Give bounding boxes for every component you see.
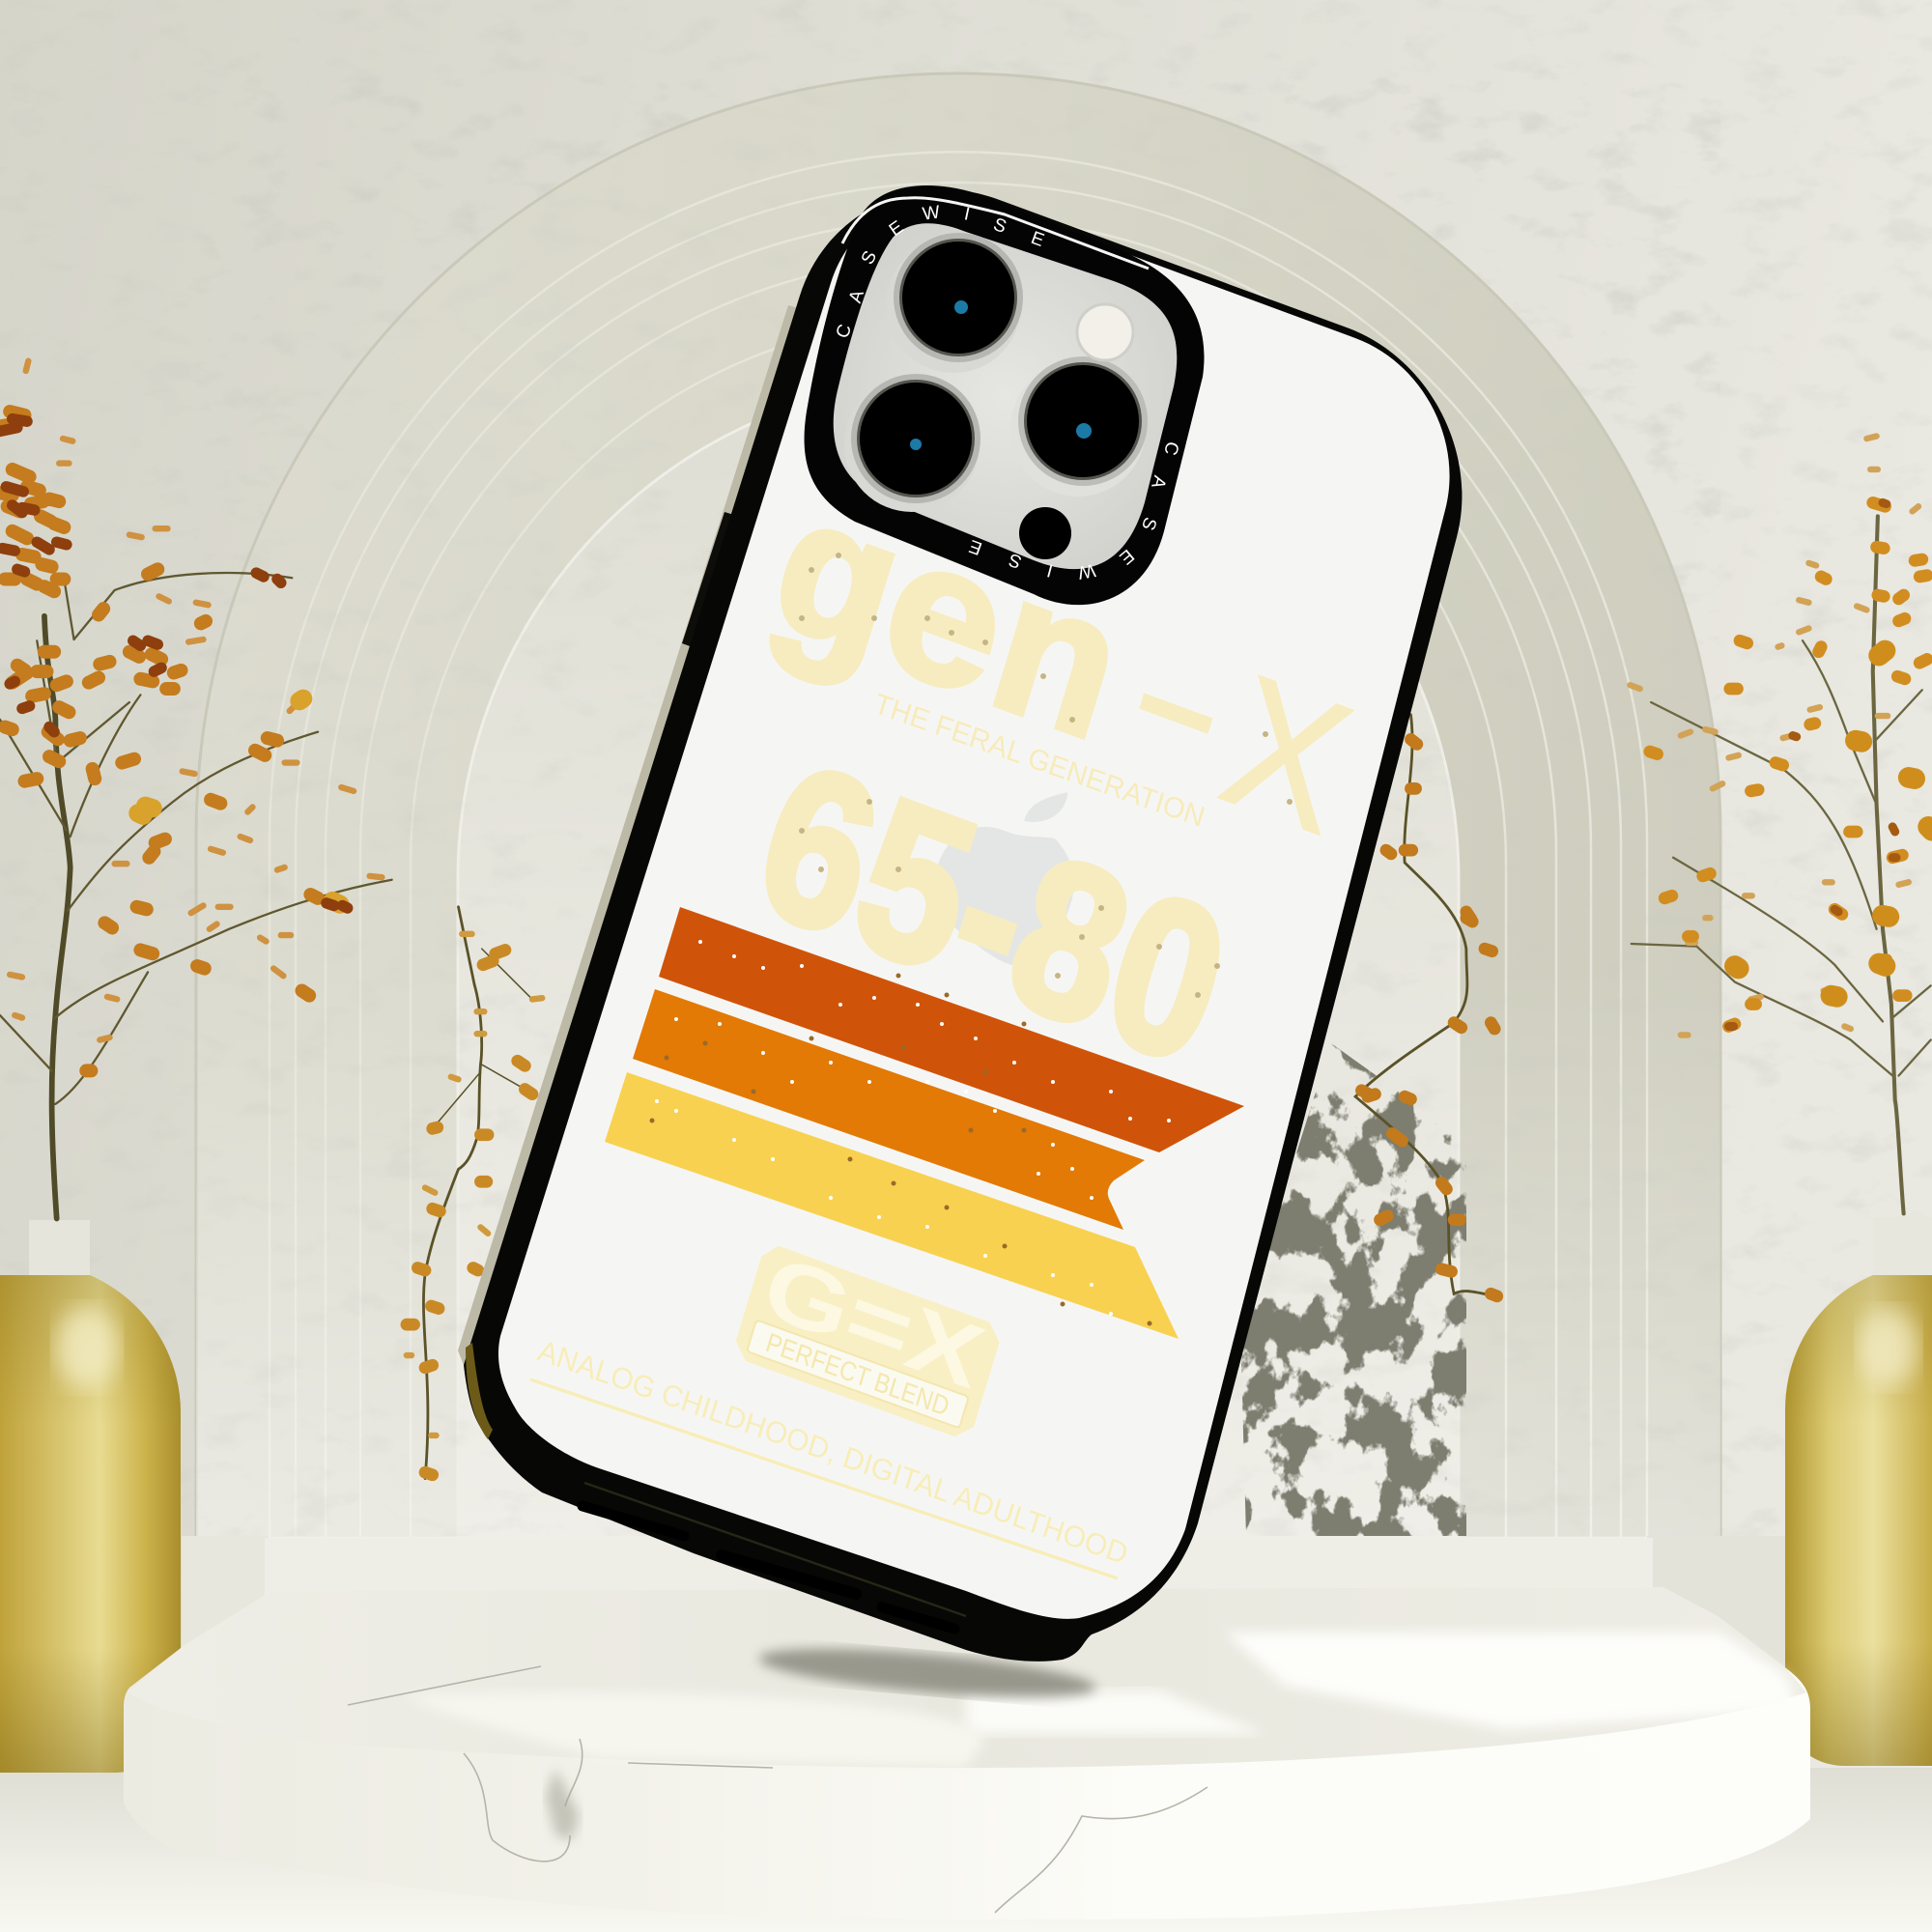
casewise ring text bottom: A [1147, 473, 1170, 491]
bottom slogan: ANALOG CHILDHOOD, DIGITAL ADULTHOOD [534, 1333, 1132, 1571]
casewise ring text top: C [833, 322, 856, 341]
plinth body [124, 1587, 1810, 1919]
side button [682, 512, 734, 647]
lens top [886, 233, 1023, 373]
years 65-80: 65-80 [735, 715, 1251, 1111]
badge caption: PERFECT BLEND [762, 1327, 952, 1422]
left hanging vine [407, 907, 542, 1479]
phone case body [464, 189, 1462, 1662]
stripe speckles [657, 942, 1169, 1314]
artwork: gen-x wordmark: – [1102, 605, 1251, 819]
sensor dot [1019, 507, 1071, 559]
artwork: gen-x wordmark: X [1195, 639, 1372, 895]
left pillar base [182, 1536, 269, 1662]
casewise ring text bottom: I [1045, 559, 1055, 581]
phone side edge [458, 305, 802, 1365]
plinth top surface [128, 1587, 1806, 1768]
artwork: gen-x wordmark: gen [744, 462, 1141, 798]
casewise ring text bottom: S [1137, 514, 1160, 533]
casewise ring text bottom: W [1076, 559, 1097, 582]
apple logo ghost [934, 792, 1074, 966]
right tree [1630, 437, 1932, 1213]
casewise ring text bottom: S [1006, 549, 1025, 572]
body seam highlight [584, 1483, 966, 1616]
G=X badge [731, 1232, 1007, 1442]
casewise ring text top: E [886, 217, 907, 241]
yellow stripe [605, 1072, 1179, 1339]
right vase [1785, 1217, 1932, 1766]
arch niche [196, 73, 1720, 1642]
bottom speaker and port slots [582, 1506, 954, 1629]
orange stripe [633, 989, 1145, 1230]
casewise ring text top: W [922, 202, 941, 225]
casewise ring text top: E [1028, 228, 1047, 251]
gold reflection [466, 1343, 493, 1439]
plinth [124, 1587, 1810, 1919]
wordmark speckles [802, 555, 1290, 995]
slogan underline [530, 1379, 1118, 1578]
casewise ring text top: S [990, 214, 1009, 238]
casewise ring text bottom: E [1115, 545, 1138, 568]
marble veining inside arch [1239, 1043, 1466, 1536]
camera plate [834, 223, 1177, 569]
screen back [498, 196, 1450, 1619]
left tree [0, 361, 392, 1218]
right hanging vine [1355, 715, 1497, 1296]
flash [1077, 304, 1133, 360]
left vase [0, 1220, 181, 1773]
casewise ring text top [833, 202, 1047, 341]
red stripe [659, 907, 1244, 1152]
marble veins [348, 1666, 1208, 1913]
badge lower panel [747, 1320, 969, 1428]
casewise ring text top: I [962, 204, 972, 225]
casewise ring text top: A [845, 287, 868, 305]
phone [458, 185, 1462, 1662]
casewise ring text top: S [858, 247, 881, 269]
lens right [1010, 356, 1148, 497]
sunlight patches [1225, 1633, 1797, 1729]
bump rim highlight [842, 198, 1149, 269]
badge lettering: G=X [753, 1236, 994, 1408]
phone shadow on plinth [757, 1639, 1097, 1707]
casewise ring text bottom: E [966, 535, 985, 558]
artwork: gen-x wordmark [744, 462, 1372, 895]
retro stripes [605, 907, 1244, 1339]
right pillar base [1647, 1536, 1787, 1681]
arch texture [196, 77, 1720, 1536]
lens lower left [844, 374, 980, 512]
floor [0, 1768, 1932, 1932]
casewise ring text bottom: C [1159, 440, 1182, 457]
casewise ring text bottom [966, 440, 1182, 582]
camera bump [805, 185, 1205, 605]
tagline: THE FERAL GENERATION [870, 688, 1208, 834]
back ledge wall [265, 1538, 1653, 1596]
